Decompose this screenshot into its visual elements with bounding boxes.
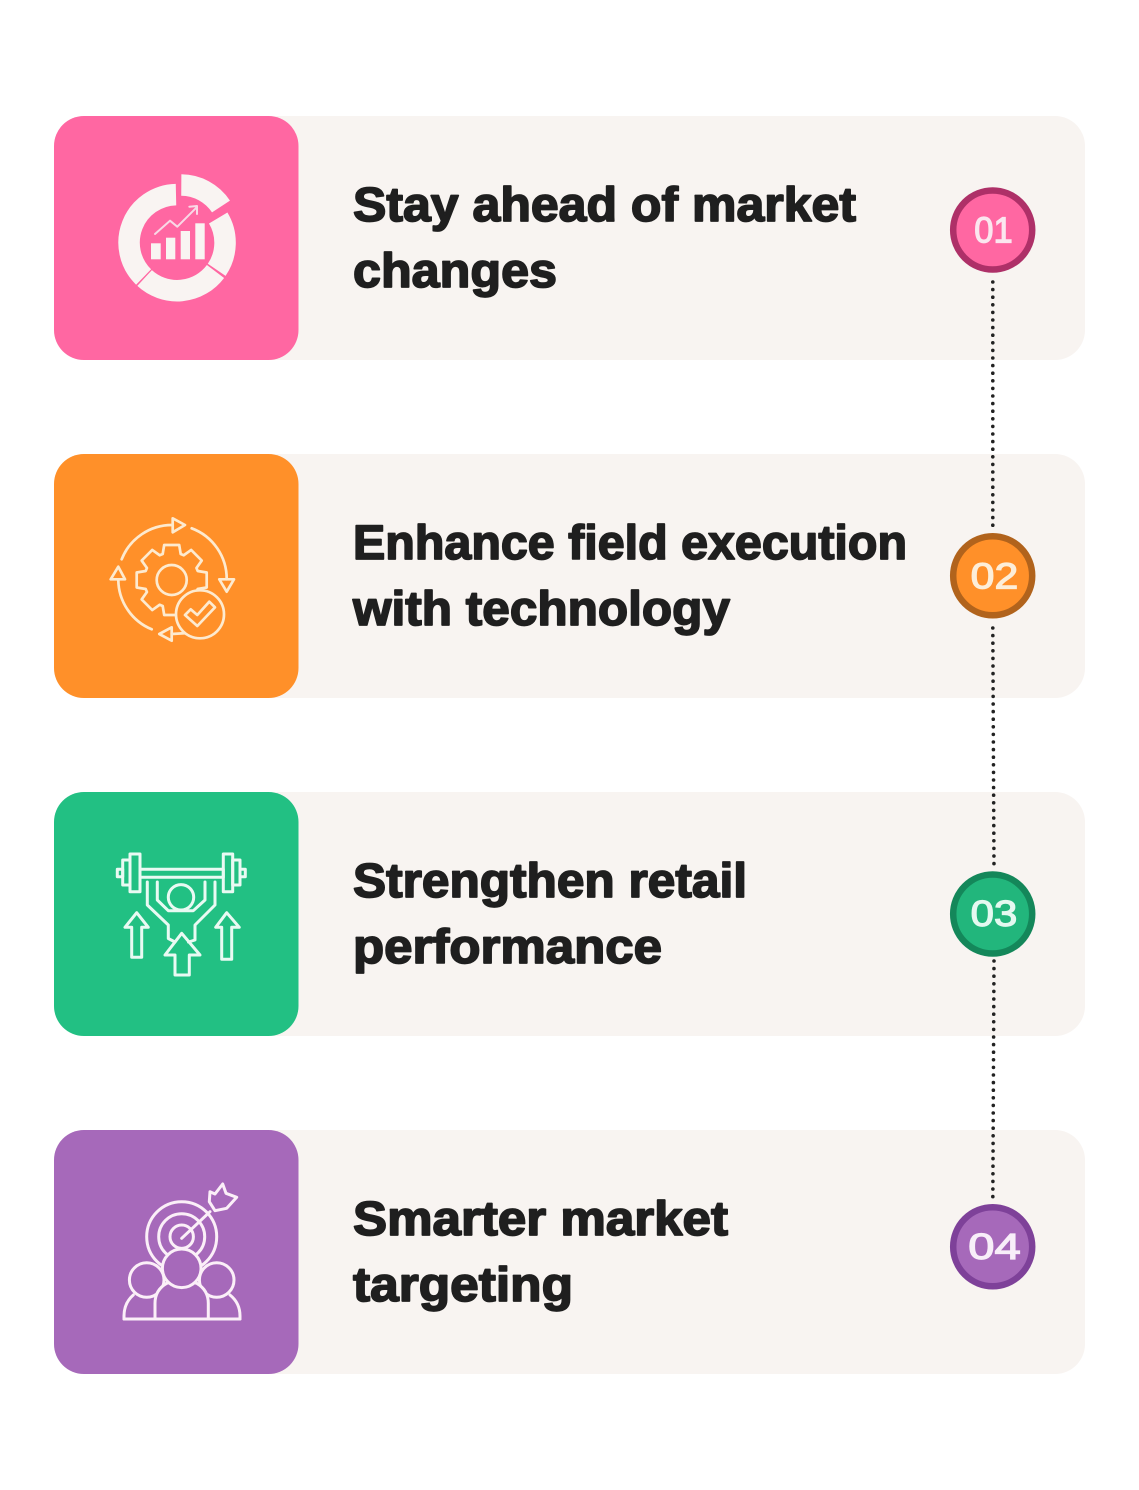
icon: gear with cycle arrows and check xyxy=(111,518,234,641)
icon tile: purple xyxy=(54,1130,298,1374)
heading: step 1: changes xyxy=(353,245,557,298)
badge: 03 xyxy=(953,874,1032,954)
heading: step 2: with technology xyxy=(352,583,730,636)
heading: step 3 xyxy=(353,855,747,974)
heading: step 4: Smarter market xyxy=(353,1193,728,1246)
heading: step 1 xyxy=(353,179,856,298)
dotted connector 03 to 04 xyxy=(993,961,994,1202)
dotted connector 02 to 03 xyxy=(993,628,994,868)
heading: step 2: Enhance field execution xyxy=(353,517,907,570)
panel: step 3 card xyxy=(54,792,1085,1036)
icon: weightlifter with up arrows xyxy=(117,854,245,975)
panel: step 2 card xyxy=(54,454,1085,698)
badge: 01: 01 xyxy=(974,210,1013,251)
icon tile: green xyxy=(54,792,298,1036)
heading: step 4 xyxy=(353,1193,728,1312)
heading: step 2 xyxy=(352,517,907,636)
badge: 04 xyxy=(953,1207,1032,1286)
badge: 02: 02 xyxy=(971,555,1018,596)
icon: donut chart with rising bars xyxy=(129,185,225,291)
heading: step 3: performance xyxy=(353,921,662,974)
heading: step 1: Stay ahead of market xyxy=(353,179,856,232)
icon: target and audience xyxy=(124,1184,240,1319)
panel: step 1 card xyxy=(54,116,1085,360)
icon tile: pink xyxy=(54,116,298,360)
heading: step 4: targeting xyxy=(353,1259,573,1312)
badge: 02 xyxy=(953,536,1032,615)
badge: 04: 04 xyxy=(968,1226,1021,1267)
badge: 03: 03 xyxy=(971,893,1017,934)
badge: 01 xyxy=(953,190,1032,270)
heading: step 3: Strengthen retail xyxy=(353,855,747,908)
icon tile: orange xyxy=(54,454,298,698)
panel: step 4 card xyxy=(54,1130,1085,1374)
dotted connector 01 to 02 xyxy=(991,282,995,531)
